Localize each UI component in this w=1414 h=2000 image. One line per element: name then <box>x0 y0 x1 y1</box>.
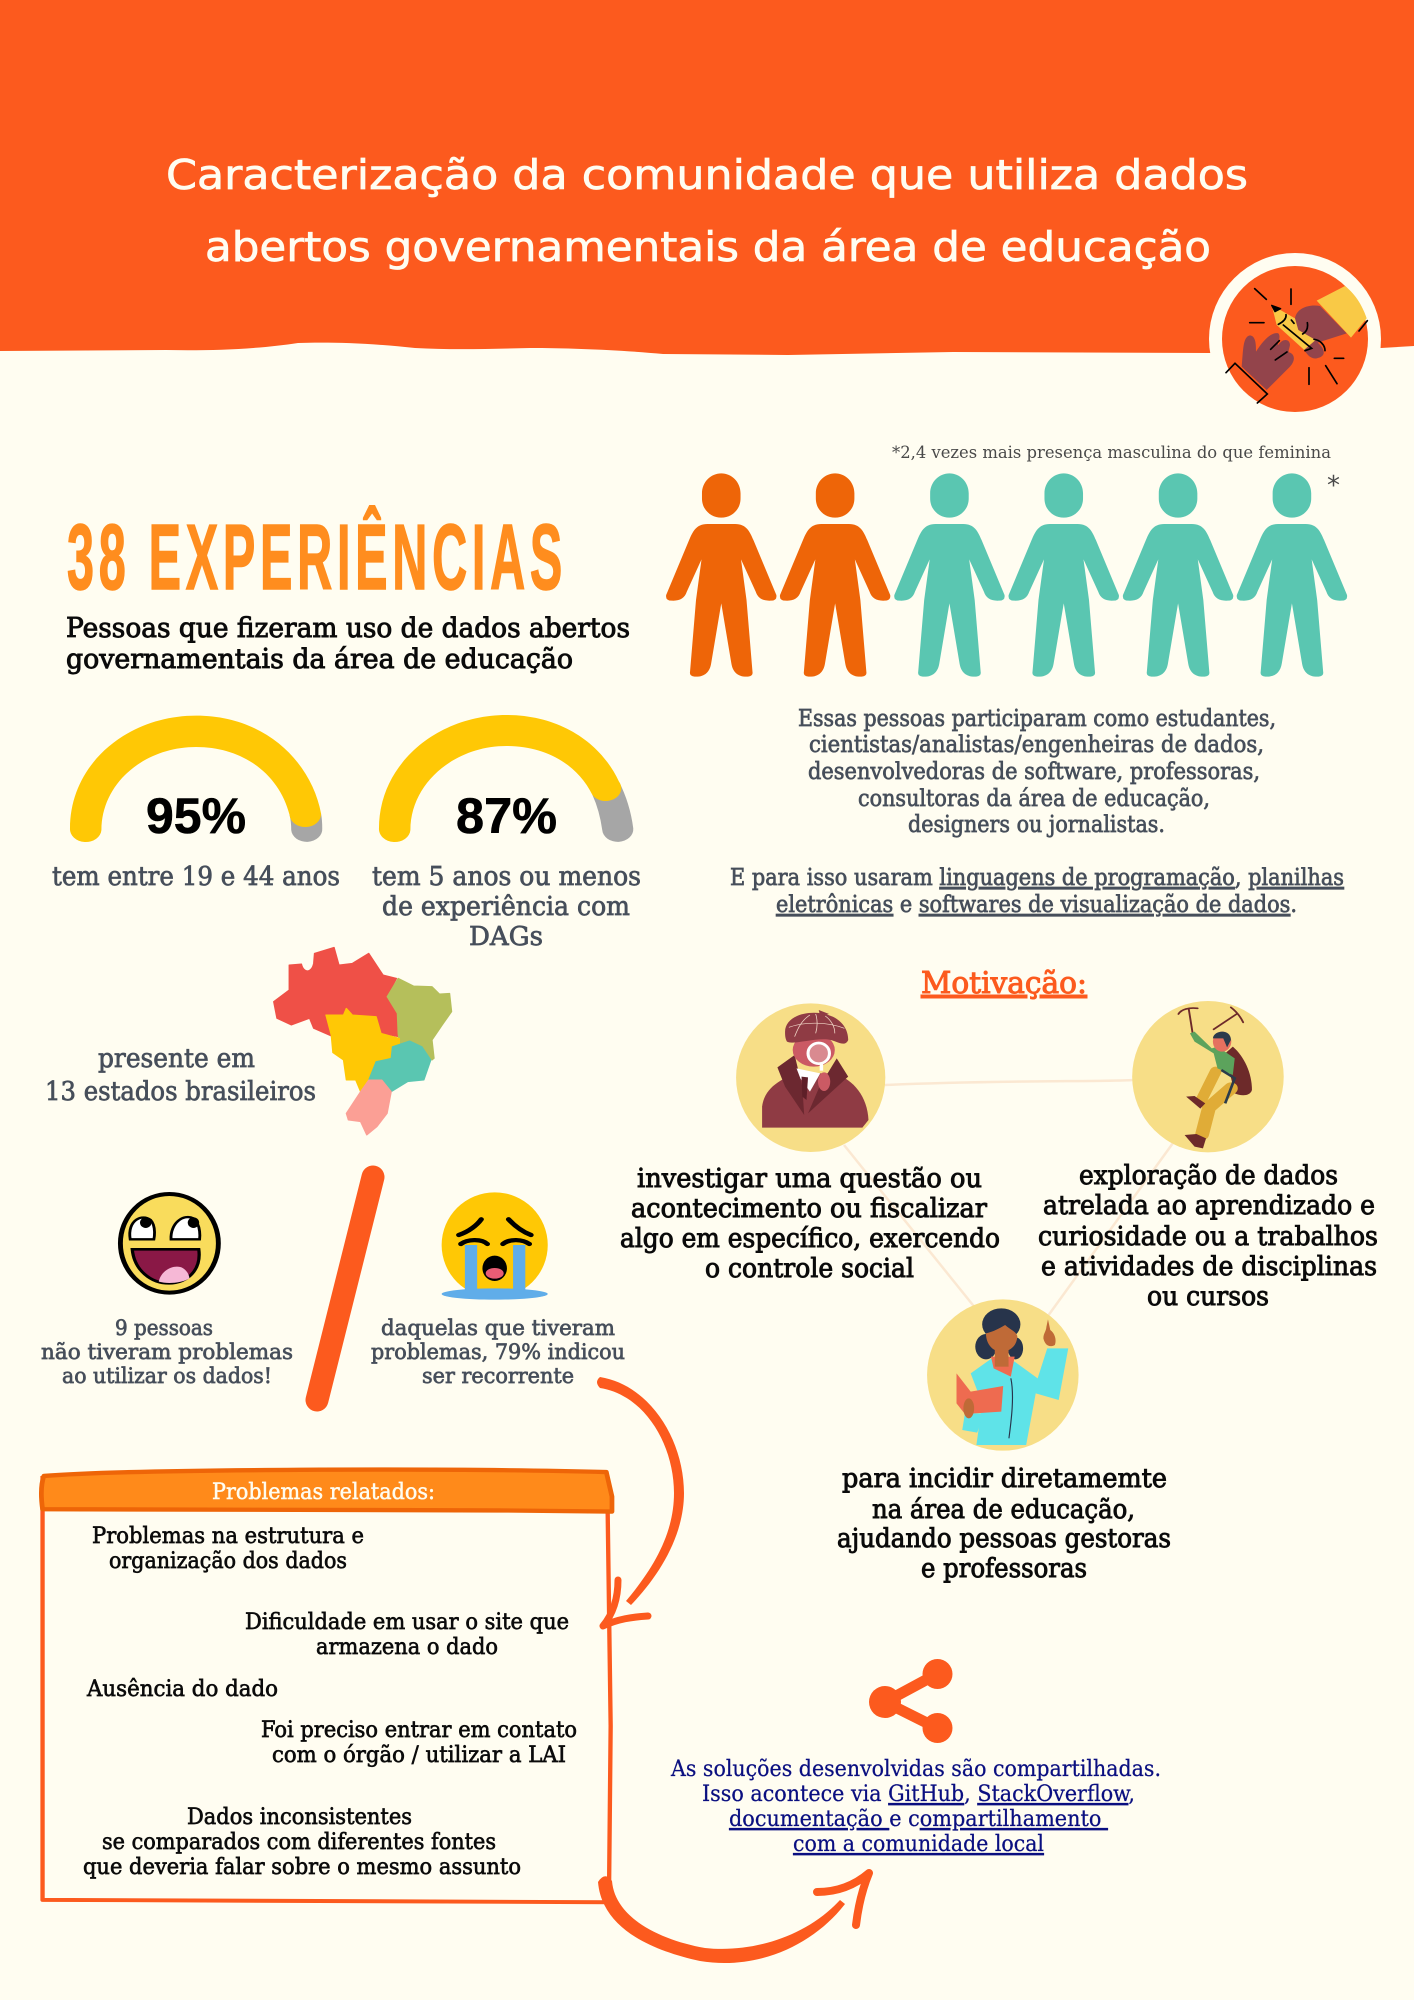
caption: recurring problems <box>371 1316 625 1389</box>
caption: no problems: não tiveram problemas <box>41 1340 293 1365</box>
panel heading: Problemas relatados: <box>212 1480 435 1505</box>
subheading: Pessoas que fizeram uso de dados abertos <box>66 613 630 644</box>
problem list: se comparados com diferentes fontes <box>102 1830 496 1855</box>
icon: happy face <box>120 1194 218 1293</box>
motivation: education impact: para incidir diretamemte <box>842 1463 1167 1494</box>
icon: share <box>869 1659 952 1743</box>
caption: no problems <box>41 1316 293 1389</box>
footnote: *2,4 vezes mais presença masculina do que feminina <box>892 443 1331 463</box>
motivation: exploration: e atividades de disciplinas <box>1041 1251 1377 1282</box>
motivation: education impact: ajudando pessoas gestoras <box>837 1523 1171 1554</box>
arrow: recurring to problems <box>597 1377 684 1626</box>
motivation: exploration: curiosidade ou a trabalhos <box>1038 1221 1378 1252</box>
subheading <box>66 613 630 675</box>
illustration: climber <box>1132 1001 1284 1152</box>
people pictogram <box>666 473 1347 677</box>
roles text: consultoras da área de educação, <box>858 786 1210 812</box>
icon: crying face <box>442 1192 548 1300</box>
motivation: investigate: acontecimento ou fiscalizar <box>631 1193 987 1224</box>
solutions text: com a comunidade local <box>793 1831 1044 1857</box>
gauge 87%: 87% <box>456 788 557 844</box>
asterisk: * <box>1327 471 1340 501</box>
roles text: cientistas/analistas/engenheiras de dados, <box>809 732 1264 758</box>
problem list: Dados inconsistentes <box>187 1805 412 1830</box>
map of Brazil <box>274 947 452 1135</box>
motivation: education impact <box>837 1463 1171 1584</box>
motivation: investigate: algo em específico, exercendo <box>620 1223 1000 1254</box>
roles text <box>798 706 1276 838</box>
roles text: desenvolvedoras de software, professoras, <box>808 759 1260 785</box>
experience caption: tem 5 anos ou menos <box>372 862 641 892</box>
motivation: education impact: na área de educação, <box>872 1494 1135 1525</box>
problem list: organização dos dados <box>109 1549 347 1574</box>
illustration: detective <box>736 1003 885 1152</box>
problem list: Ausência do dado <box>86 1677 278 1702</box>
motivation heading: Motivação: <box>921 966 1087 1001</box>
title <box>166 151 1248 271</box>
problem list: Foi preciso entrar em contato <box>261 1718 577 1743</box>
motivation: education impact: e professoras <box>921 1553 1087 1584</box>
caption: no problems: 9 pessoas <box>115 1316 213 1341</box>
caption: recurring problems: daquelas que tiveram <box>381 1316 615 1341</box>
solutions text <box>670 1756 1161 1857</box>
caption: recurring problems: ser recorrente <box>422 1364 574 1389</box>
solutions text: documentação e compartilhamento <box>729 1806 1108 1832</box>
experience caption <box>372 862 641 952</box>
caption: no problems: ao utilizar os dados! <box>62 1364 272 1389</box>
states caption: 13 estados brasileiros <box>45 1077 316 1107</box>
tools text: eletrônicas e softwares de visualização de dados. <box>776 892 1297 918</box>
icon: hands passing pencil <box>1209 253 1381 425</box>
solutions text: Isso acontece via GitHub, StackOverflow, <box>702 1781 1135 1807</box>
experience caption: de experiência com <box>382 892 630 922</box>
tools text <box>730 865 1344 918</box>
title: abertos governamentais da área de educação <box>205 223 1211 271</box>
arrow: problems to solutions <box>598 1873 869 1963</box>
problem list <box>83 1524 577 1880</box>
age caption: tem entre 19 e 44 anos <box>52 862 340 892</box>
experience caption: DAGs <box>469 922 543 952</box>
illustration: teacher <box>927 1299 1079 1451</box>
title: Caracterização da comunidade que utiliza dados <box>166 151 1248 199</box>
gauge 95%: 95% <box>146 788 246 844</box>
motivation: exploration: atrelada ao aprendizado e <box>1043 1190 1375 1221</box>
gauge 87% <box>379 715 633 844</box>
roles text: designers ou jornalistas. <box>908 812 1165 838</box>
gauge 95% <box>70 716 322 844</box>
big number heading: 38 EXPERIÊNCIAS <box>67 505 567 609</box>
solutions text: As soluções desenvolvidas são compartilhadas. <box>670 1756 1161 1782</box>
header band <box>0 0 1414 355</box>
divider slash <box>317 1177 373 1400</box>
motivation: investigate <box>620 1163 1000 1284</box>
problem list: Dificuldade em usar o site que <box>245 1610 569 1635</box>
states caption: presente em <box>98 1044 255 1074</box>
roles text: Essas pessoas participaram como estudantes, <box>798 706 1276 732</box>
motivation: exploration: ou cursos <box>1147 1281 1269 1312</box>
motivation: investigate: investigar uma questão ou <box>637 1163 982 1194</box>
motivation: exploration: exploração de dados <box>1079 1160 1338 1191</box>
caption: recurring problems: problemas, 79% indicou <box>371 1340 625 1365</box>
states caption <box>45 1044 316 1107</box>
motivation connectors <box>844 1080 1173 1338</box>
subheading: governamentais da área de educação <box>66 644 573 675</box>
motivation: exploration <box>1038 1160 1378 1312</box>
tools text: E para isso usaram linguagens de programação, planilhas <box>730 865 1344 891</box>
problem list: Problemas na estrutura e <box>92 1524 364 1549</box>
panel: reported problems <box>41 1470 612 1902</box>
problem list: com o órgão / utilizar a LAI <box>272 1743 566 1768</box>
motivation: investigate: o controle social <box>705 1253 914 1284</box>
problem list: armazena o dado <box>316 1635 498 1660</box>
problem list: que deveria falar sobre o mesmo assunto <box>83 1855 521 1880</box>
